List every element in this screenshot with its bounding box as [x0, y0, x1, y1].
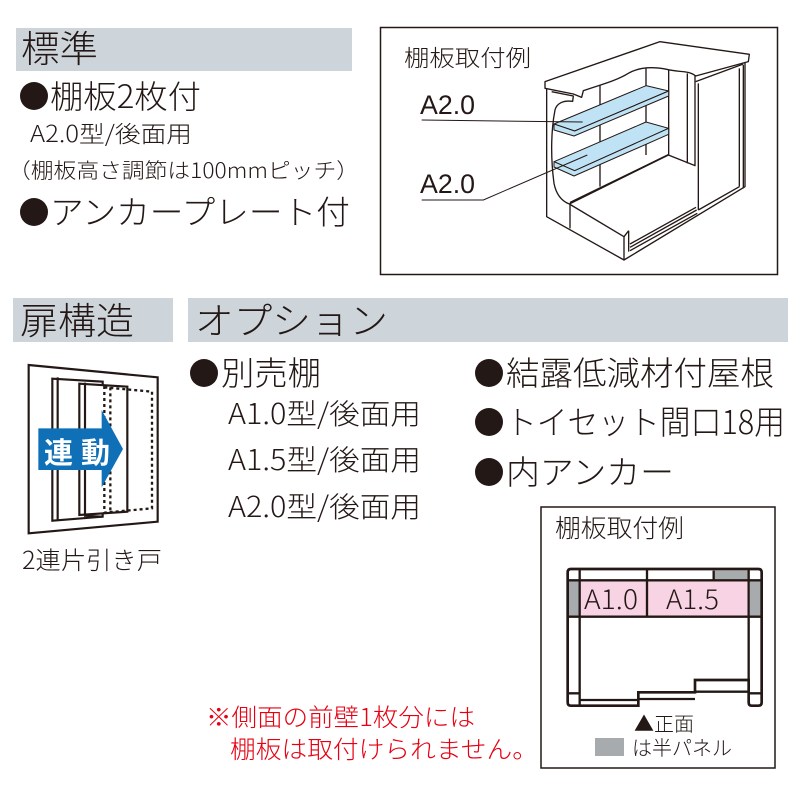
illustration: linked sliding door	[29, 365, 158, 533]
bullet: condensation roof: 結露低減材付屋根	[506, 347, 774, 395]
panel: shelf mounting example, plan	[541, 507, 775, 768]
heading: door structure: 扉構造	[20, 291, 134, 345]
label: upper shelf A2.0: A2.0	[420, 90, 475, 120]
note: red warning: 棚板は取付けられません。	[230, 731, 538, 766]
note: red warning	[206, 699, 538, 766]
bullet: separately sold shelves: 別売棚	[221, 347, 321, 395]
heading: shelf example plan: 棚板取付例	[555, 509, 684, 545]
bullet: anchor plate: アンカープレート付	[50, 186, 350, 234]
bullet: inner anchor: 内アンカー	[506, 446, 674, 494]
caption: two-panel sliding door: 2連片引き戸	[22, 542, 162, 577]
panel: shelf mounting example, 3D	[380, 28, 778, 274]
label: lower shelf A2.0: A2.0	[420, 169, 475, 199]
text: shelf type: A2.0型/後面用	[30, 115, 192, 149]
label: front: ▲正面	[634, 708, 694, 737]
legend: half panel: は半パネル	[632, 732, 732, 761]
label: A1.5: A1.5	[666, 578, 719, 617]
text: A1.5: A1.5型/後面用	[228, 438, 421, 479]
shelf upper	[554, 86, 669, 136]
panel: standard equipment	[8, 19, 359, 234]
label: linked: 連動	[44, 430, 110, 472]
panel: options	[188, 291, 788, 526]
bullet: shelves: 棚板2枚付	[50, 72, 201, 118]
heading: standard: 標準	[21, 19, 98, 73]
heading: shelf example: 棚板取付例	[404, 39, 531, 73]
label: A1.0: A1.0	[584, 578, 638, 617]
text: A2.0: A2.0型/後面用	[228, 485, 421, 526]
text: A1.0: A1.0型/後面用	[228, 392, 421, 433]
illustration: storage shed cutaway	[422, 42, 749, 260]
shelf lower	[554, 122, 669, 176]
panel: door structure	[13, 291, 173, 577]
bullet: gutter set: トイセット間口18用	[506, 396, 785, 444]
text: shelf pitch note: （棚板高さ調節は100mmピッチ）	[8, 155, 359, 185]
note: red warning: ※側面の前壁1枚分には	[206, 699, 475, 734]
heading: options: オプション	[195, 291, 388, 345]
plan diagram	[568, 569, 762, 706]
